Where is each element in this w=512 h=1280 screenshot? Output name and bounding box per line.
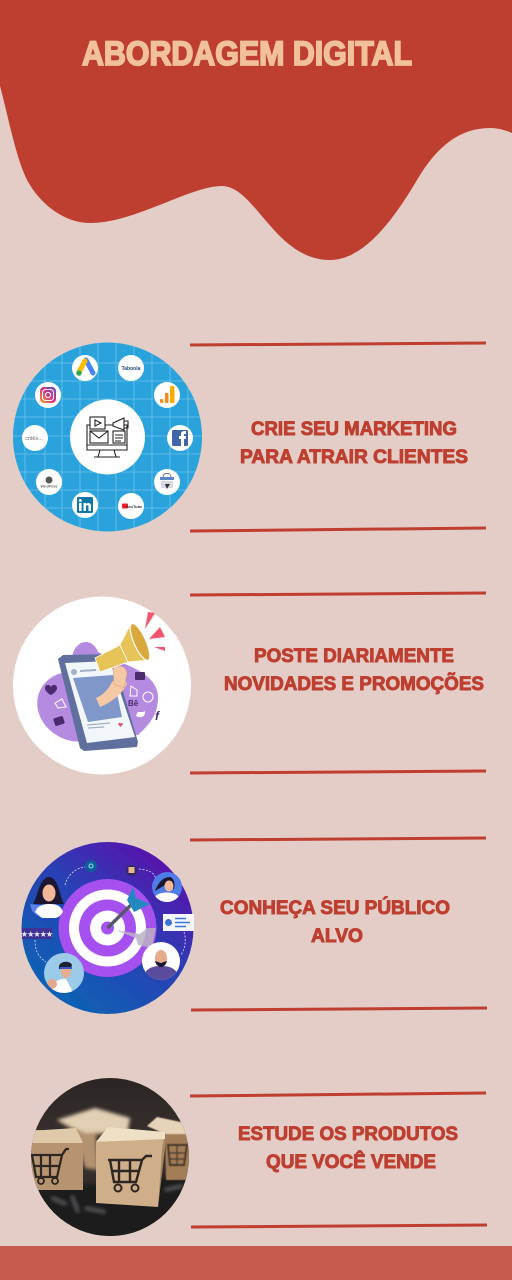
social media illustration circle bbox=[13, 596, 191, 774]
icon: man avatar right bbox=[142, 942, 180, 980]
heading: conheça seu público: ALVO bbox=[311, 926, 363, 947]
icon: text logo bbox=[22, 425, 48, 451]
icon: youtube bbox=[118, 493, 144, 519]
icon: thumbs badge bbox=[126, 865, 137, 876]
icon: text logo: cnlês... bbox=[25, 436, 43, 442]
divider top 1 bbox=[190, 343, 486, 345]
icon: burst marks bbox=[145, 612, 165, 651]
icon: wordpress: WordPress bbox=[41, 484, 58, 488]
icon: linkedin bbox=[72, 492, 98, 518]
keyboard bbox=[38, 1175, 187, 1236]
heading: crie seu marketing: PARA ATRAIR CLIENTES bbox=[240, 447, 468, 468]
back box bbox=[57, 1108, 130, 1170]
purple blob bbox=[37, 642, 158, 742]
divider top 3 bbox=[190, 838, 486, 840]
audience target circle bbox=[21, 842, 194, 1014]
icon: social glyphs: f bbox=[155, 709, 160, 723]
icon: rating stars: ★★★★★ bbox=[21, 930, 53, 938]
icon: taboola bbox=[118, 355, 144, 381]
icon: profile card bbox=[163, 914, 194, 931]
heading: poste diariamente: POSTE DIARIAMENTE bbox=[254, 646, 454, 667]
icon: dart bbox=[108, 887, 150, 928]
icon: social glyphs: Bē bbox=[128, 699, 139, 708]
icon: man avatar left bbox=[44, 953, 84, 994]
divider bottom 2 bbox=[190, 771, 486, 773]
icon: analytics bbox=[154, 382, 180, 408]
footer band bbox=[0, 1246, 512, 1280]
icon: woman avatar left bbox=[30, 877, 64, 918]
icon: dashed connectors bbox=[35, 867, 185, 962]
icon: phone bbox=[58, 654, 138, 751]
marketing channels circle bbox=[10, 340, 205, 535]
section 1: marketing bbox=[10, 340, 486, 535]
icon: computer hub bbox=[70, 400, 145, 474]
icon: instagram bbox=[35, 382, 61, 408]
icon: shop bbox=[154, 469, 180, 495]
heading: estude os produtos bbox=[238, 1124, 458, 1173]
divider bottom 4 bbox=[191, 1225, 487, 1227]
heading: estude os produtos: QUE VOCÊ VENDE bbox=[266, 1151, 436, 1173]
icon: bullseye bbox=[58, 879, 156, 977]
heading: crie seu marketing bbox=[240, 419, 468, 468]
heading: conheça seu público: CONHEÇA SEU PÚBLICO bbox=[220, 897, 450, 919]
cardboard boxes photo circle bbox=[28, 1075, 193, 1240]
icon: search badge bbox=[85, 860, 97, 872]
section 4: products bbox=[28, 1075, 487, 1240]
section 2: social posts bbox=[13, 593, 486, 774]
heading: poste diariamente bbox=[224, 646, 484, 695]
left box bbox=[28, 1128, 83, 1190]
divider bottom 3 bbox=[191, 1008, 487, 1010]
icon: taboola: Taboola bbox=[122, 366, 141, 372]
icon: social glyphs bbox=[45, 672, 160, 726]
heading: conheça seu público bbox=[220, 897, 450, 947]
header wave shape bbox=[0, 0, 512, 260]
icon: rating stars bbox=[21, 928, 53, 939]
front box bbox=[96, 1127, 166, 1207]
section 3: target audience bbox=[21, 838, 487, 1014]
heading: crie seu marketing: CRIE SEU MARKETING bbox=[251, 419, 457, 440]
divider top 4 bbox=[190, 1093, 486, 1096]
icon: wordpress bbox=[36, 469, 62, 495]
icon: youtube: YouTube bbox=[126, 504, 143, 509]
icon: hand holding megaphone bbox=[95, 621, 154, 707]
title: ABORDAGEM DIGITAL bbox=[82, 35, 412, 73]
icon: facebook bbox=[167, 425, 193, 451]
icon: google ads bbox=[72, 355, 98, 381]
icon: woman avatar right bbox=[152, 872, 182, 904]
heading: estude os produtos: ESTUDE OS PRODUTOS bbox=[238, 1124, 458, 1145]
heading: poste diariamente: NOVIDADES E PROMOÇÕES bbox=[224, 673, 484, 695]
right box bbox=[147, 1117, 190, 1180]
divider bottom 1 bbox=[190, 528, 486, 531]
divider top 2 bbox=[190, 593, 486, 595]
